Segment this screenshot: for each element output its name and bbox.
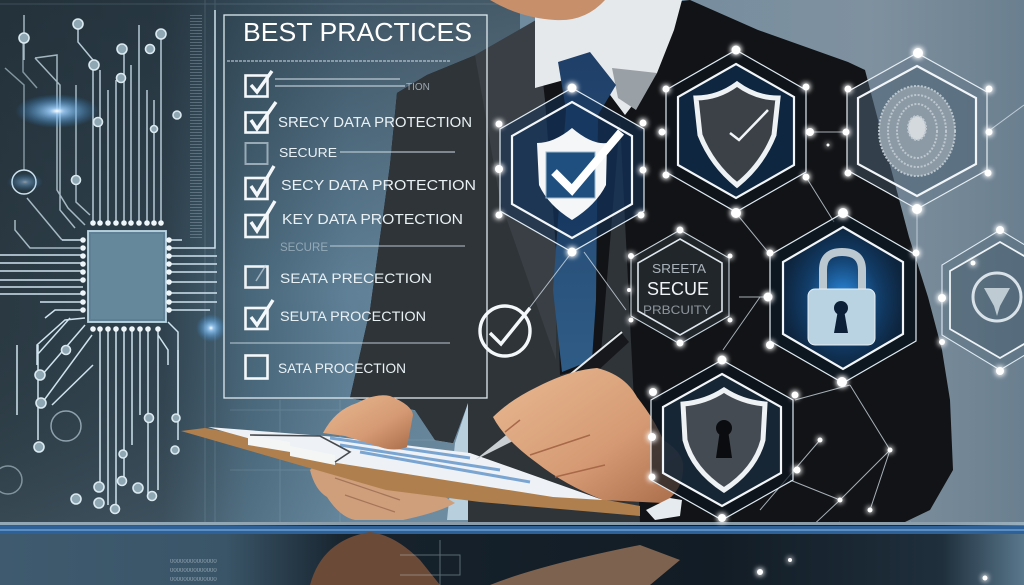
left thumb — [323, 395, 413, 450]
shiny lapel — [612, 68, 657, 110]
hexagon: secure label — [631, 230, 729, 344]
hexagon: padlock — [770, 213, 916, 383]
check circle — [480, 306, 530, 356]
table surface and reflection: 00000000000000 — [170, 568, 217, 574]
row 8: SATA PROCECTION — [278, 360, 406, 376]
top traces — [78, 25, 161, 223]
clipboard, paper and hands — [181, 331, 683, 520]
hex text: PRBCUITY — [643, 303, 711, 317]
circuit: ring nodes — [0, 170, 81, 494]
table surface and reflection: 00000000000000 — [170, 577, 217, 583]
icon: fingerprint — [879, 86, 955, 176]
row 7 — [246, 300, 426, 329]
shirt collar — [535, 0, 682, 115]
row 8 — [246, 356, 406, 378]
icon: padlock — [808, 252, 875, 345]
row 6: SEATA PRECECTION — [280, 270, 432, 286]
panel: best practices checklist — [224, 15, 487, 398]
icon: pen — [475, 331, 629, 460]
row 5: KEY DATA PROTECTION — [282, 211, 463, 228]
clip — [248, 435, 350, 465]
row 3: SECURE — [279, 145, 337, 160]
cuff — [646, 498, 682, 520]
light gap by arm — [447, 403, 468, 520]
hexagon: fingerprint — [847, 53, 987, 209]
hexagon: shield with check — [500, 88, 644, 252]
icon: shield with small check — [696, 84, 778, 185]
clipboard — [181, 428, 640, 516]
circuit board graphic — [0, 10, 217, 512]
table surface and reflection — [0, 522, 1024, 585]
hexagon: right badge — [942, 230, 1024, 370]
microchip — [80, 220, 172, 332]
person: suit — [350, 0, 953, 522]
right traces — [169, 10, 217, 310]
hex text — [643, 261, 711, 317]
icon: shield check — [537, 128, 621, 220]
small caption lines: 00000000000000 — [170, 559, 217, 565]
title: BEST PRACTICES — [243, 17, 472, 47]
right hand — [493, 368, 683, 503]
circuit nodes — [19, 19, 181, 514]
left torso and sleeve — [350, 20, 640, 522]
chin — [490, 0, 605, 20]
hexagon: keyhole shield — [651, 360, 793, 520]
icon: seal — [973, 273, 1021, 321]
icon: keyhole shield — [683, 390, 765, 490]
row 1: TION — [406, 82, 430, 93]
hex text: SREETA — [652, 261, 706, 276]
row 4 — [246, 166, 476, 199]
bottom traces — [100, 322, 178, 512]
row 1 — [246, 71, 430, 96]
row 2: SRECY DATA PROTECTION — [278, 114, 472, 131]
row 3 — [246, 143, 455, 164]
row 7: SEUTA PROCECTION — [280, 308, 426, 324]
lens flares — [7, 94, 226, 342]
left traces — [0, 240, 83, 318]
tie — [553, 52, 616, 372]
row: faint secure: SECURE — [280, 240, 328, 254]
left hand, lower fingers — [310, 450, 455, 520]
network nodes — [495, 46, 1004, 580]
connector lines — [505, 105, 1024, 580]
suit jacket — [350, 0, 953, 522]
shoulder panel — [475, 20, 556, 360]
row 6 — [246, 265, 432, 288]
hexagon: shield outline — [666, 50, 806, 212]
panel frame — [224, 15, 487, 398]
hex text: SECUE — [647, 279, 709, 299]
row 4: SECY DATA PROTECTION — [281, 177, 476, 194]
paper — [208, 427, 603, 500]
row 5 — [246, 201, 463, 237]
row 2 — [246, 102, 472, 132]
